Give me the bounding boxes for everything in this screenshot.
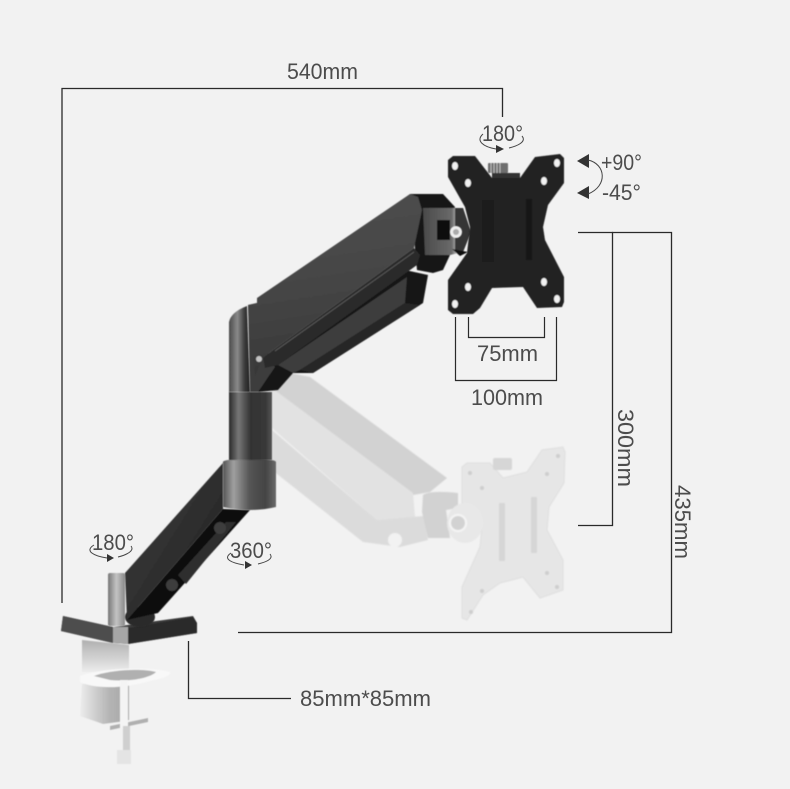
rotation: tilt +90 -45: -45° <box>602 180 641 205</box>
lower arm <box>125 463 250 627</box>
label: 300mm: 300mm <box>613 409 638 487</box>
rotation: tilt +90 -45 <box>577 150 642 205</box>
bolts <box>214 522 226 534</box>
rotation: 180 top <box>480 121 523 153</box>
middle column <box>229 392 272 460</box>
upper arm <box>248 194 471 392</box>
rotation: tilt +90 -45: +90° <box>601 150 642 175</box>
knob <box>488 163 508 173</box>
black end block <box>410 194 455 273</box>
mount slots <box>482 200 494 262</box>
dimension line: 75mm VESA <box>468 317 544 338</box>
tilt bracket screw <box>450 226 462 238</box>
label: 100mm: 100mm <box>471 385 543 410</box>
ghost arm: lowered position <box>272 373 565 620</box>
mounting holes <box>452 159 560 308</box>
hinge bracket <box>423 208 471 255</box>
rotation: 180 lower left: 180° <box>92 530 134 555</box>
rotation: 180 top: 180° <box>482 121 523 146</box>
rail <box>263 248 420 368</box>
silhouette behind arm <box>258 270 428 392</box>
collar <box>223 459 276 510</box>
ghost bracket <box>447 503 483 543</box>
pivot screw <box>256 356 262 362</box>
ghost monitor plate <box>462 447 565 620</box>
main cover <box>248 194 422 377</box>
clamp: silver desk clamp <box>80 640 170 764</box>
label: 540mm: 540mm <box>287 59 358 84</box>
ghost hinge <box>422 492 458 538</box>
rotation: 360: 360° <box>230 538 272 563</box>
elbow side <box>248 303 275 392</box>
monitor plate <box>448 154 564 314</box>
label: 85mm*85mm: 85mm*85mm <box>300 686 431 711</box>
socket <box>125 607 155 627</box>
dimension line: 300mm <box>578 232 612 526</box>
label: 75mm: 75mm <box>477 341 538 366</box>
dimension line: 540mm <box>62 88 502 603</box>
label: 435mm: 435mm <box>670 485 695 559</box>
ghost roller <box>388 533 402 547</box>
upper column elbow <box>229 306 250 392</box>
ghost slots <box>499 503 505 561</box>
dimension line: 435mm <box>238 232 672 632</box>
base plate <box>61 616 197 644</box>
dimension line: clamp 85mm <box>188 641 291 698</box>
post <box>108 573 125 626</box>
dimension line: 100mm VESA <box>456 317 556 380</box>
ghost knob <box>493 458 512 470</box>
lower body <box>278 277 407 373</box>
